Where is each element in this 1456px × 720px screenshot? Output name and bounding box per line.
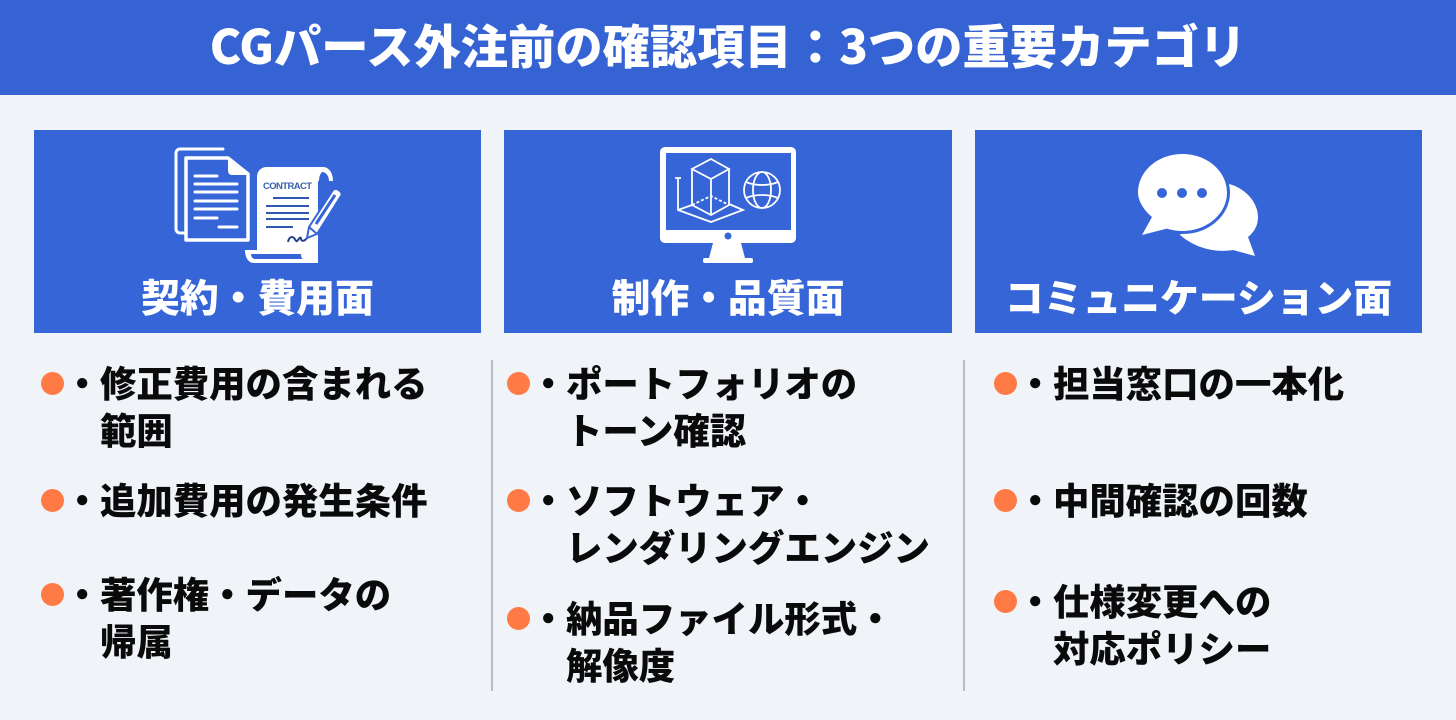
panel: communication <box>975 130 1422 333</box>
column 2 item: portfolio tone <box>507 356 857 454</box>
column 1 item: copyright: 帰属 <box>100 614 173 666</box>
column 3 item: single contact: 担当窓口の一本化 <box>1053 356 1344 408</box>
text: ・ <box>530 473 566 525</box>
column 3 item: spec changes: 仕様変更への <box>1053 574 1271 626</box>
panel label: 契約・費用面 <box>141 268 374 324</box>
column 2 item: delivery format: 納品ファイル形式・ <box>566 591 894 643</box>
text: ・ <box>530 356 566 408</box>
icon: documents and contract with pen: CONTRACT <box>263 181 312 192</box>
column 2 item: software <box>507 473 930 572</box>
column 3 item: spec changes: 対応ポリシー <box>1053 620 1271 672</box>
column 1 item: revision cost: 範囲 <box>100 402 173 454</box>
text: ・ <box>64 473 100 525</box>
column 2 item: delivery format <box>507 591 894 690</box>
panel label: 制作・品質面 <box>612 268 844 324</box>
title banner <box>0 0 1456 95</box>
text: ・ <box>530 591 566 643</box>
text: ・ <box>64 356 100 408</box>
icon: monitor with 3D box and globe <box>660 147 796 263</box>
icon: speech bubbles <box>1138 154 1258 256</box>
column 2 item: delivery format: 解像度 <box>566 638 675 690</box>
column 1 item: copyright <box>41 567 391 666</box>
text: ・ <box>1017 574 1053 626</box>
column 1 item: copyright: 著作権・データの <box>100 567 391 619</box>
title banner: CGパース外注前の確認項目：3つの重要カテゴリ <box>210 9 1246 78</box>
panel: contract and cost <box>34 130 481 333</box>
icon: documents and contract with pen <box>174 148 341 263</box>
text: ・ <box>1017 473 1053 525</box>
column 1 item: revision cost: 修正費用の含まれる <box>100 356 428 408</box>
text: ・ <box>1017 356 1053 408</box>
column 2 item: portfolio tone: ポートフォリオの <box>566 356 857 408</box>
column 3 item: spec changes <box>994 574 1271 672</box>
column 2 item: software: レンダリングエンジン <box>566 520 930 572</box>
column 2 item: portfolio tone: トーン確認 <box>566 402 746 454</box>
text: ・ <box>64 567 100 619</box>
column 2 item: software: ソフトウェア・ <box>566 473 821 525</box>
column 3 item: interim reviews: 中間確認の回数 <box>1053 473 1308 525</box>
panel: production and quality <box>504 130 952 333</box>
panel label: コミュニケーション面 <box>1005 268 1392 324</box>
column 1 item: revision cost <box>41 356 428 454</box>
column 1 item: additional cost: 追加費用の発生条件 <box>100 473 428 525</box>
